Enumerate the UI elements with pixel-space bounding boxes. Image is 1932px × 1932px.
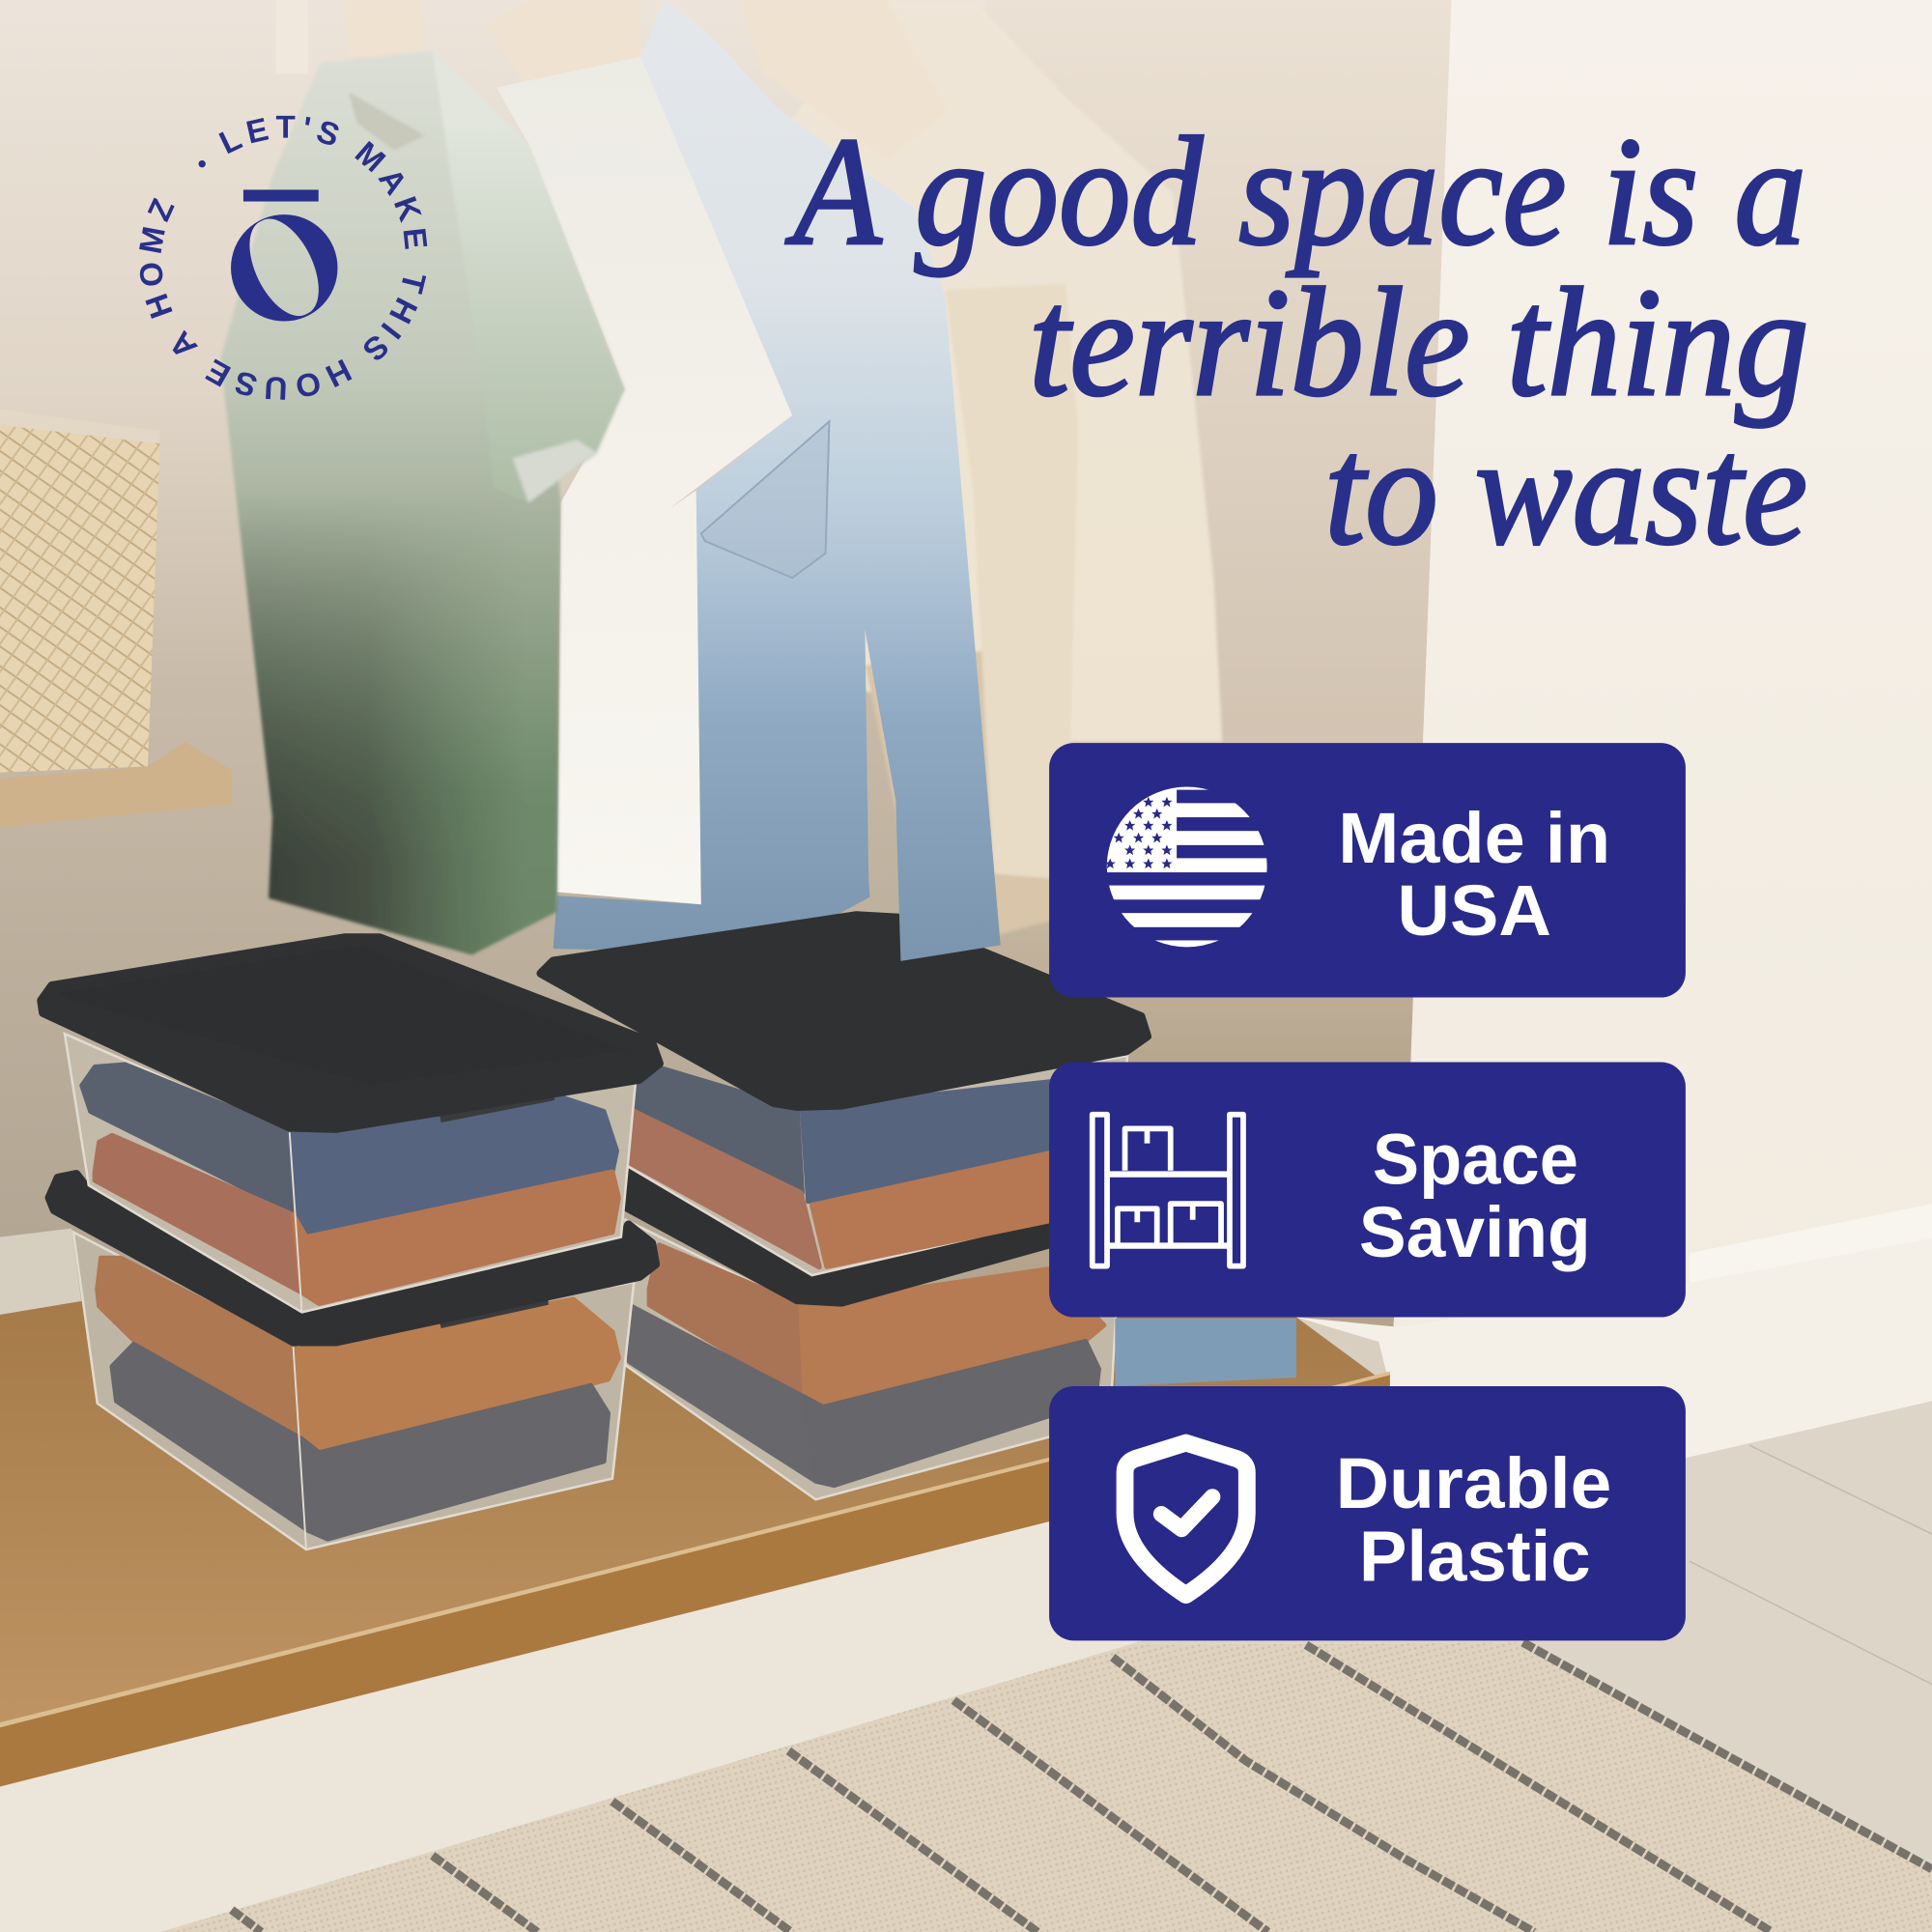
striped rug: [160, 1642, 1932, 1932]
panel: durable plastic: [1049, 1386, 1686, 1640]
denim shirt body: [554, 0, 974, 952]
white t-shirt: [497, 57, 792, 904]
headline: terrible thing: [1029, 256, 1808, 428]
icon: shield with check: [1125, 1443, 1247, 1595]
icon: shelving with boxes: [1093, 1115, 1243, 1266]
right wall: [1392, 0, 1932, 1343]
label: Durable Plastic: [1336, 1443, 1611, 1596]
latch: [438, 1082, 554, 1122]
label: Space Saving: Space: [1373, 1120, 1578, 1200]
wood ledge top: [0, 1301, 1390, 1725]
label: Made in USA: USA: [1397, 870, 1551, 951]
logo dot: [198, 160, 206, 167]
label: Made in USA: Made in: [1338, 798, 1610, 878]
floorboard seams: [1690, 1445, 1932, 1685]
panel: made in USA: [1049, 743, 1686, 998]
label: Made in USA: [1338, 798, 1610, 951]
storage box 2 (bottom left): [49, 1175, 656, 1549]
alcove back wall: [985, 0, 1452, 1343]
icon: US flag circle: [1105, 786, 1269, 951]
hanging coat and sweater: [345, 0, 1222, 955]
label: Space Saving: [1359, 1120, 1591, 1272]
logo circular tagline: LET'S MAKE THIS HOUSE A HOMZ: [139, 116, 427, 400]
folded jeans: [1115, 1319, 1296, 1386]
denim shirt sleeve: [863, 207, 1001, 961]
left baseboard: [0, 1229, 81, 1315]
green t-shirt: [220, 50, 625, 955]
logo badge: [139, 116, 427, 400]
label: Durable Plastic: Plastic: [1359, 1516, 1591, 1596]
right baseboard: [1296, 1238, 1932, 1528]
white riser: [0, 1435, 1528, 1932]
left wall: [0, 0, 1023, 1343]
basket: [0, 409, 160, 773]
label: Durable Plastic: Durable: [1336, 1443, 1611, 1523]
rail: [276, 0, 308, 74]
headline: A good space is a: [785, 105, 1806, 277]
wood ledge front edge: [0, 1374, 1390, 1786]
storage box 3 (top right): [541, 916, 1148, 1275]
headline: to waste: [1324, 405, 1807, 577]
denim shirt pocket: [701, 421, 829, 578]
label: Space Saving: Saving: [1359, 1192, 1591, 1272]
floor right: [1128, 1401, 1932, 1869]
panel: space saving: [1049, 1062, 1686, 1318]
logo mark: O with macron: [231, 189, 337, 322]
latch: [438, 1289, 549, 1328]
storage box 1 (top left): [42, 938, 659, 1312]
storage box 4 (bottom right): [624, 1169, 1117, 1499]
headline: [785, 105, 1808, 577]
wooden wall shelf: [0, 742, 232, 827]
